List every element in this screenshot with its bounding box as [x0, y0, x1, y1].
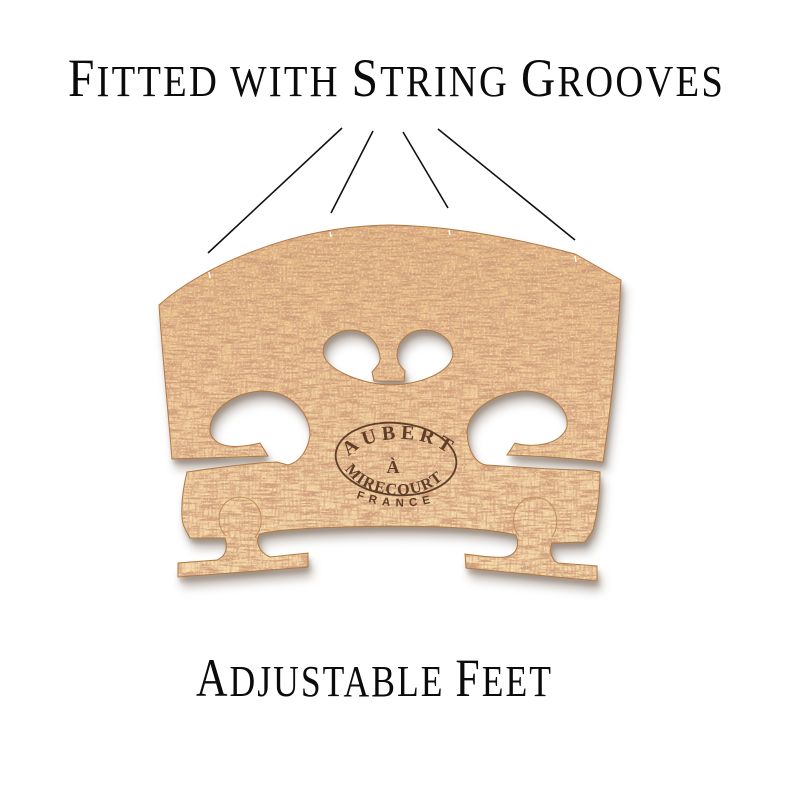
bridge edge [159, 225, 621, 581]
near drop shadow [161, 230, 623, 586]
wide drop shadow [163, 235, 625, 591]
stamp text: A: À [386, 456, 400, 477]
stamp oval [333, 418, 459, 500]
title: FITTED WITH STRING GROOVES [68, 48, 725, 108]
stamp text: Aubert: AUBERT [344, 426, 454, 456]
right adjuster peg [514, 497, 557, 537]
stamp text: France: FRANCE [356, 490, 430, 507]
stamp text: Mirecourt: MIRECOURT [344, 462, 441, 494]
caption: ADJUSTABLE FEET [196, 648, 553, 708]
maple body with wood grain [150, 220, 630, 590]
maker stamp [334, 422, 458, 507]
left adjuster peg [219, 497, 261, 537]
string groove notches [209, 230, 576, 278]
pointer lines to string grooves [208, 128, 575, 253]
violin bridge [157, 224, 630, 596]
